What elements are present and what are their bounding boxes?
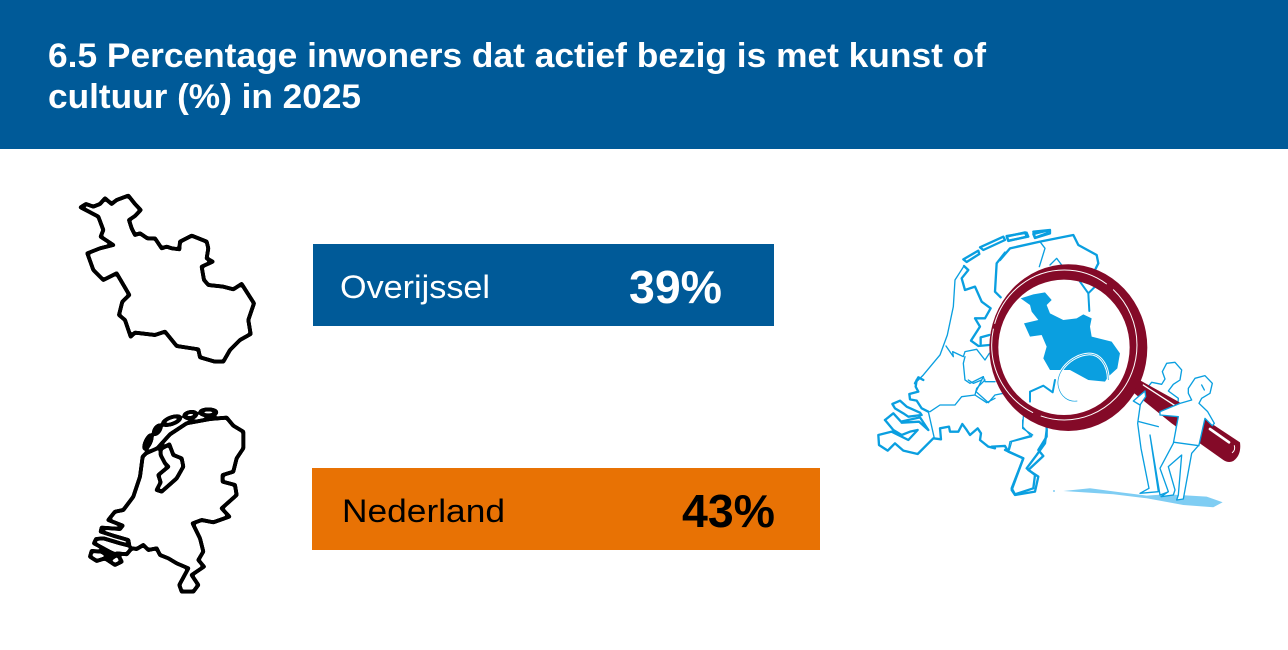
icon: Nederland outline (90, 409, 243, 592)
bar: Nederland: Nederland (342, 493, 505, 529)
north and east of the map (1000, 230, 1098, 311)
bar: Nederland (312, 468, 820, 550)
shadow (1063, 488, 1223, 507)
title (48, 37, 987, 116)
icon: Overijssel outline (81, 196, 254, 362)
bar: Overijssel: 39% (629, 261, 722, 313)
map of the Netherlands (878, 230, 1098, 495)
Overijssel highlighted (1021, 292, 1120, 382)
title: 6.5 Percentage inwoners dat actief bezig is met kunst of (48, 37, 987, 75)
map parts east (1005, 380, 1055, 494)
magnifier ring (989, 264, 1147, 431)
bar: Nederland: 43% (682, 485, 775, 537)
person: front (1160, 376, 1214, 500)
person: back (1138, 362, 1182, 495)
illustration: magnifying glass over map with people (878, 230, 1240, 507)
header band (0, 0, 1288, 149)
Zeeland (878, 380, 995, 454)
arm and hand of back person (1133, 391, 1146, 405)
title: cultuur (%) in 2025 (48, 78, 361, 116)
bar: Overijssel (313, 244, 774, 326)
magnifier handle (1134, 379, 1240, 462)
glass reflection (1058, 354, 1108, 401)
bar: Overijssel: Overijssel (340, 269, 490, 305)
